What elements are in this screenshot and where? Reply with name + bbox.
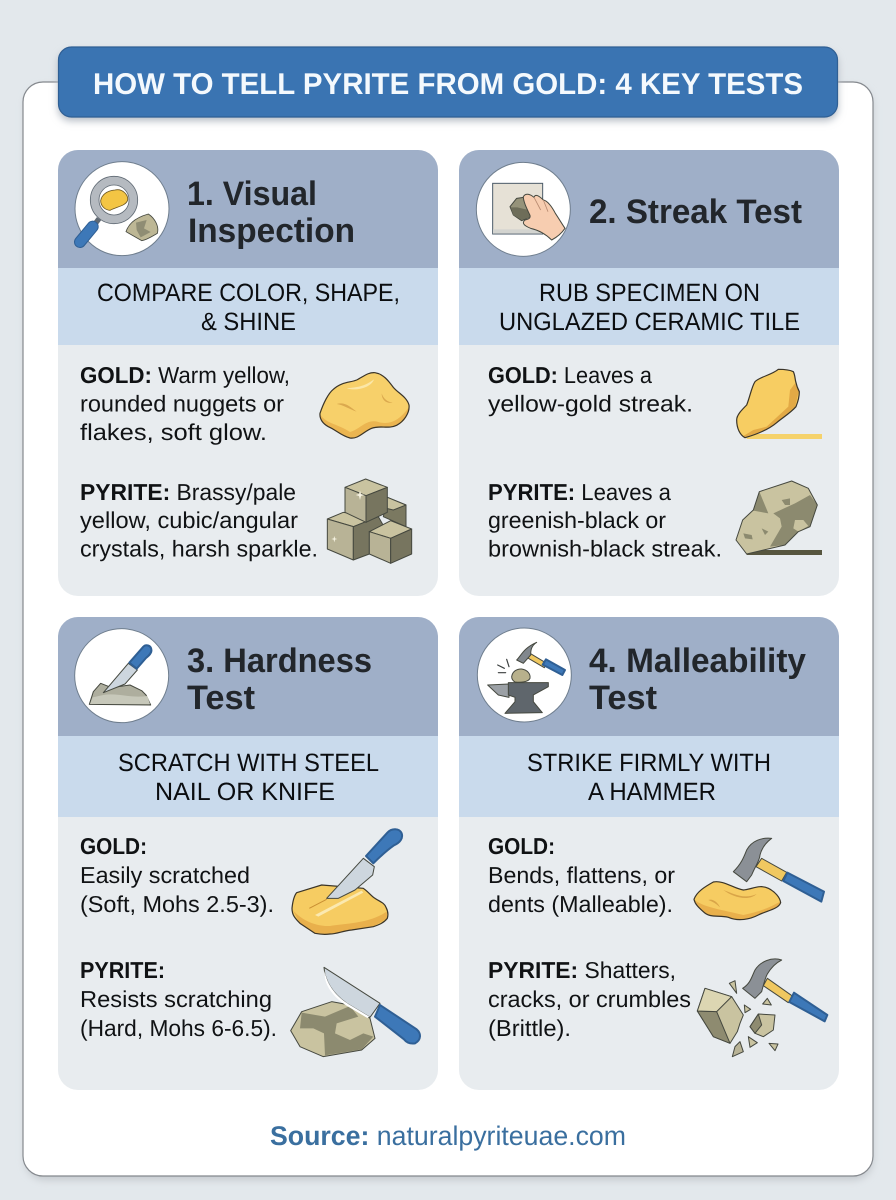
pyrite text [80, 479, 318, 562]
instruction: COMPARE COLOR, SHAPE, [97, 279, 400, 307]
heading: 2. Streak Test [589, 193, 802, 231]
instruction: & SHINE [201, 308, 296, 336]
icon: gold with yellow streak [737, 369, 822, 439]
gold text: Bends, flattens, or [488, 862, 675, 888]
gold text: (Soft, Mohs 2.5-3). [80, 891, 274, 917]
pyrite text: brownish-black streak. [488, 536, 722, 562]
title banner: HOW TO TELL PYRITE FROM GOLD: 4 KEY TESTS [93, 68, 803, 101]
instruction: SCRATCH WITH STEEL [118, 749, 379, 777]
gold text: yellow-gold streak. [488, 390, 693, 416]
instruction: NAIL OR KNIFE [155, 778, 335, 806]
icon: pyrite with dark streak [736, 481, 822, 555]
gold text [80, 362, 290, 445]
pyrite text: cracks, or crumbles [488, 986, 691, 1012]
pyrite text: PYRITE: Brassy/pale [80, 479, 296, 505]
gold text [488, 833, 675, 917]
panel: 2 streak test [459, 150, 839, 596]
heading: 3. Hardness [187, 642, 372, 680]
heading [589, 642, 806, 717]
icon: hand rubbing rock on tile [476, 162, 570, 256]
gold text: dents (Malleable). [488, 891, 673, 917]
gold text: flakes, soft glow. [80, 419, 267, 445]
panel: 4 malleability test [459, 617, 839, 1090]
instruction [97, 279, 400, 336]
source line: Source: naturalpyriteuae.com [270, 1121, 626, 1151]
icon: knife on pyrite [291, 967, 420, 1057]
instruction [118, 749, 379, 806]
heading: 1. Visual [187, 175, 317, 213]
pyrite text: (Brittle). [488, 1015, 571, 1041]
gold text [80, 833, 274, 917]
pyrite text [80, 957, 277, 1041]
heading: Test [589, 679, 657, 717]
instruction: STRIKE FIRMLY WITH [527, 749, 771, 777]
pyrite text: PYRITE: [80, 957, 165, 983]
icon: hammer and flattened gold [694, 838, 824, 920]
icon: hammer and shattered pyrite [697, 959, 827, 1057]
pyrite text [488, 957, 691, 1041]
icon: magnifier over gold and pyrite [75, 162, 169, 256]
heading [187, 642, 372, 717]
pyrite text: PYRITE: Shatters, [488, 957, 676, 983]
instruction: A HAMMER [588, 778, 716, 806]
gold text [488, 362, 693, 416]
heading [187, 175, 355, 250]
instruction [527, 749, 771, 806]
gold text: GOLD: Warm yellow, [80, 362, 290, 388]
icon: knife scratching rock [75, 629, 169, 723]
pyrite text: PYRITE: Leaves a [488, 479, 671, 505]
pyrite text: greenish-black or [488, 507, 666, 533]
pyrite text: yellow, cubic/angular [80, 507, 298, 533]
panel: 3 hardness test [58, 617, 438, 1090]
gold text: Easily scratched [80, 862, 250, 888]
gold text: GOLD: [80, 833, 147, 859]
icon: knife scratching gold [292, 829, 402, 934]
gold text: rounded nuggets or [80, 390, 284, 416]
pyrite text: Resists scratching [80, 986, 272, 1012]
gold text: GOLD: Leaves a [488, 362, 652, 388]
instruction: UNGLAZED CERAMIC TILE [499, 308, 800, 336]
instruction [499, 279, 800, 336]
pyrite text: crystals, harsh sparkle. [80, 536, 318, 562]
pyrite text: (Hard, Mohs 6-6.5). [80, 1015, 277, 1041]
pyrite text [488, 479, 722, 562]
panel: 1 visual inspection [58, 150, 438, 596]
icon: gold nugget [320, 373, 409, 438]
heading: Inspection [188, 212, 355, 250]
icon: hammer striking rock on anvil [477, 628, 571, 722]
title banner [58, 47, 838, 121]
gold text: GOLD: [488, 833, 555, 859]
instruction: RUB SPECIMEN ON [539, 279, 760, 307]
icon: pyrite cubes [327, 479, 412, 563]
heading: 4. Malleability [589, 642, 806, 680]
heading: Test [187, 679, 255, 717]
